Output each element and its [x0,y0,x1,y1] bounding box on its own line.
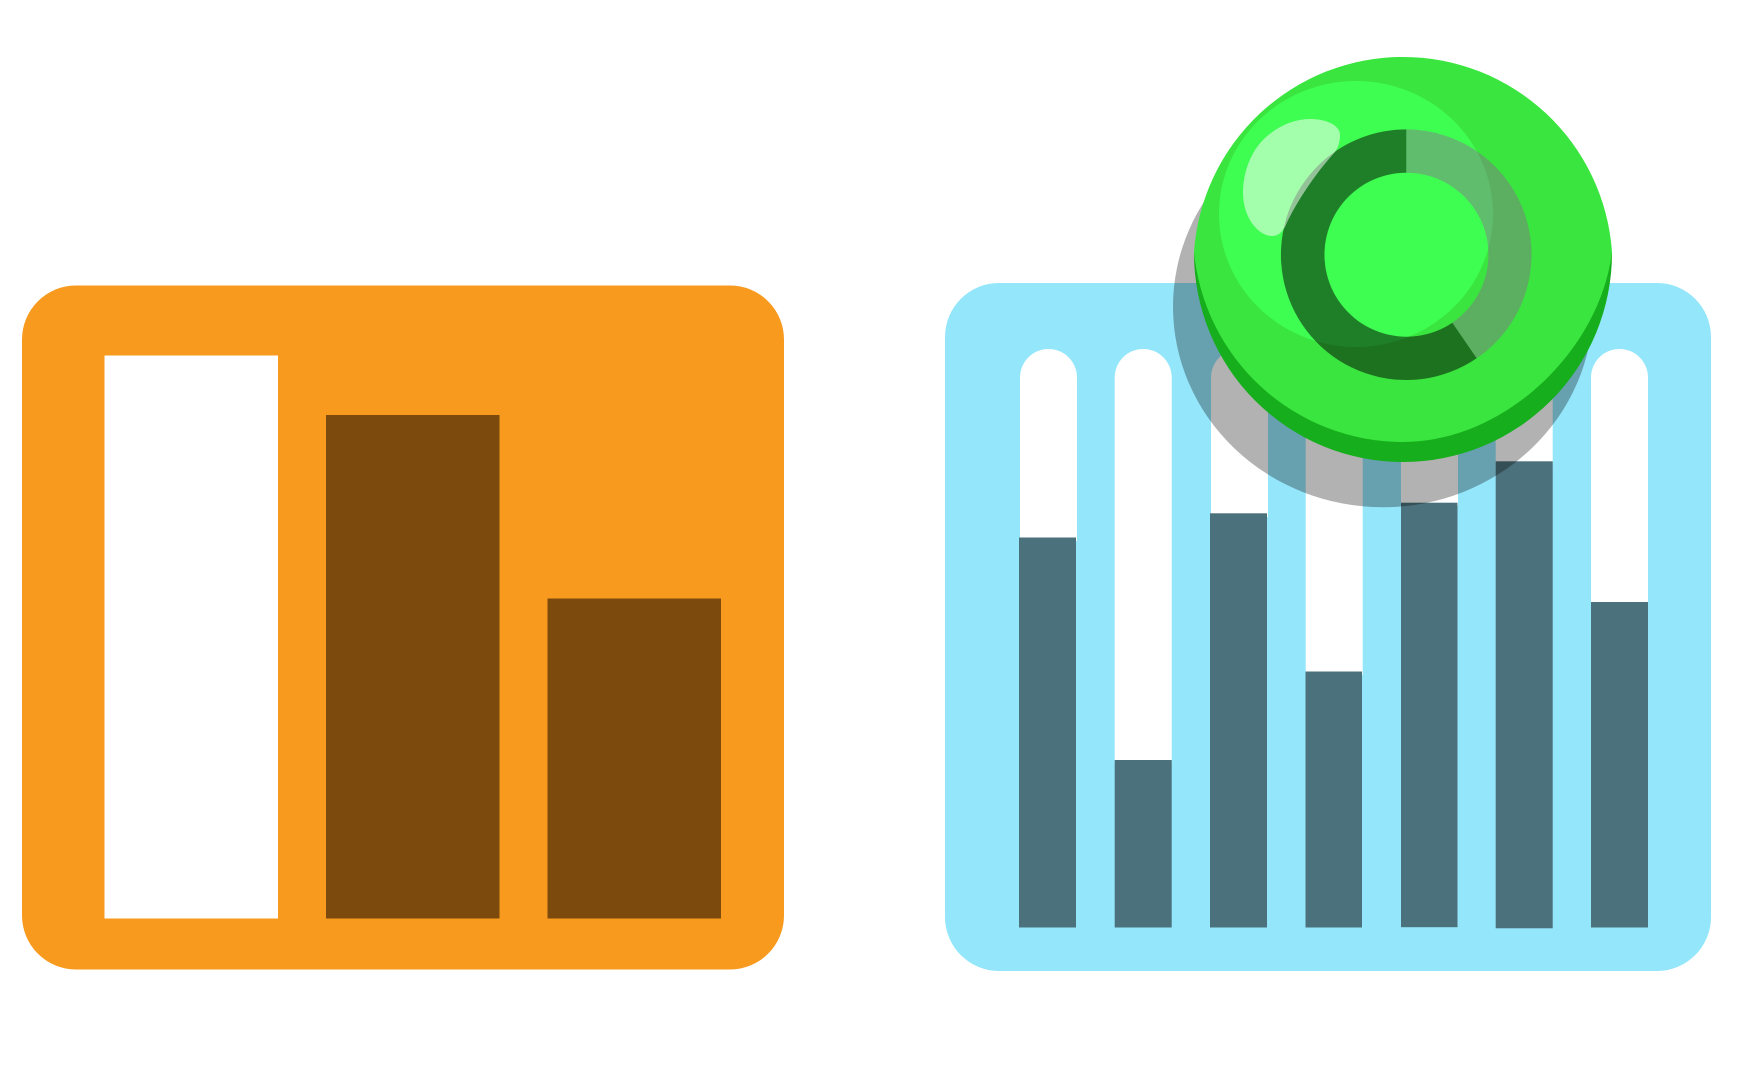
white rounded tracks [1020,349,1648,763]
shadow of green button [1173,106,1593,507]
bar: brown medium [326,415,500,918]
icon: green button [1194,57,1612,462]
progress ring: light segment [1406,129,1532,358]
progress ring: dark segment [1281,129,1477,380]
panel: blue bar chart icon [945,283,1711,971]
button top face [1194,57,1612,442]
bar: white tall [104,356,278,918]
button highlight [1219,81,1493,347]
button base edge [1194,253,1612,462]
dark value bars [1019,461,1648,928]
panel: orange bar chart icon [22,286,784,970]
bar: brown short [548,598,721,918]
gloss reflection [1243,119,1340,236]
